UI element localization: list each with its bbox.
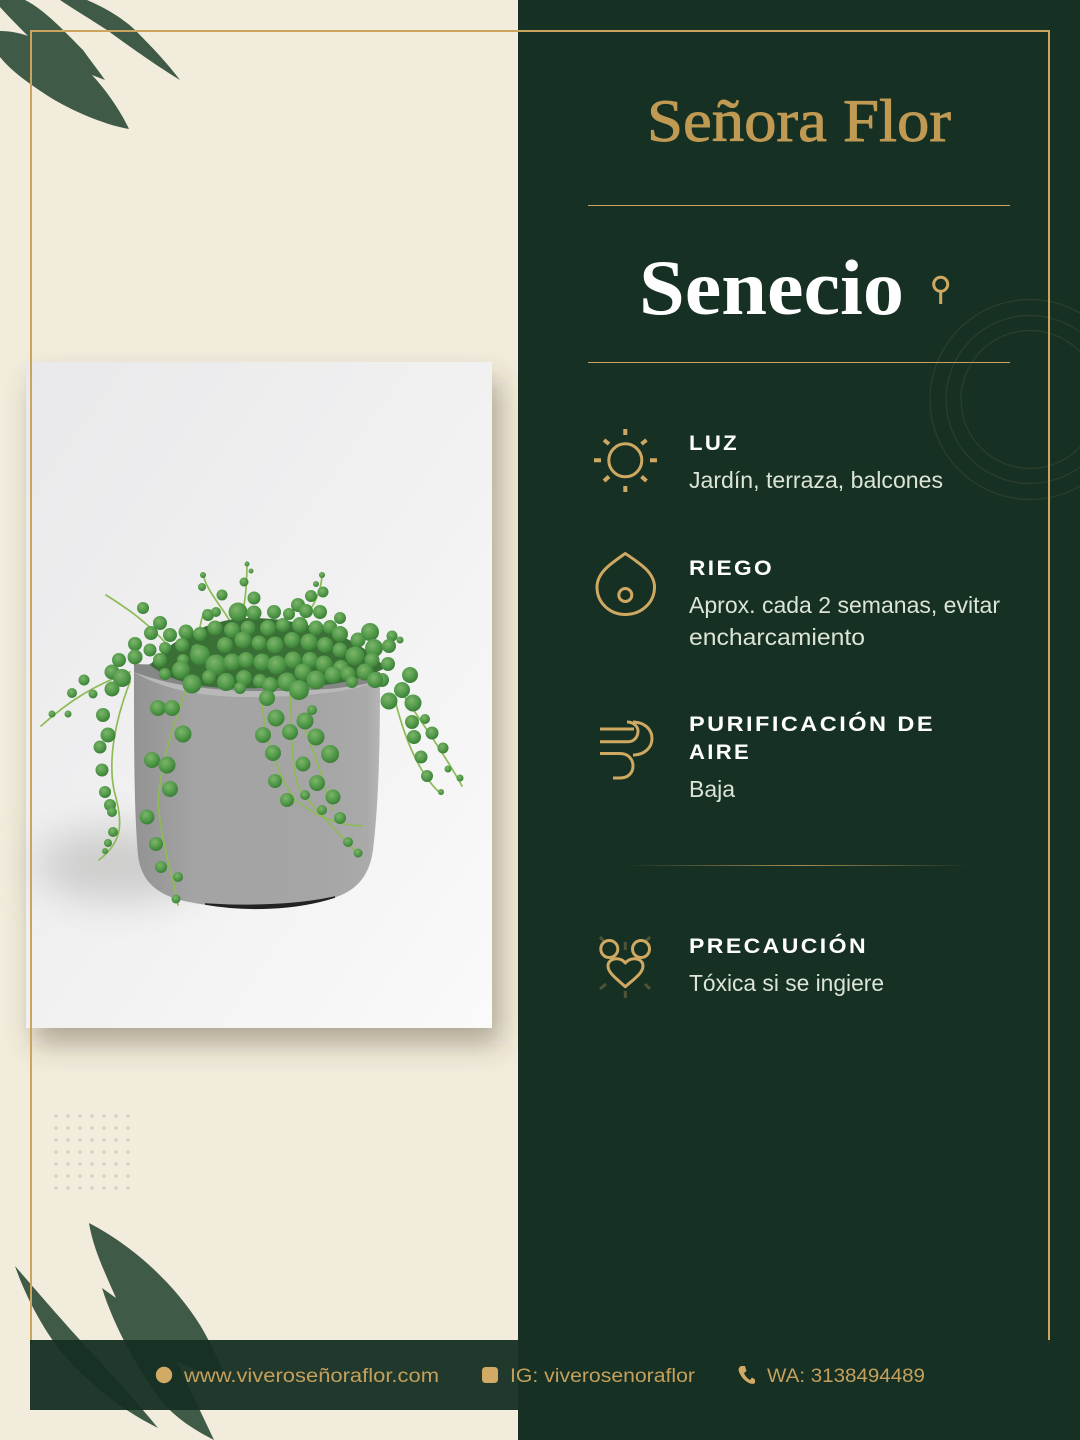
label: PURIFICACIÓN DE (689, 712, 935, 736)
photo: potted senecio plant (26, 362, 492, 1028)
value: Tóxica si se ingiere (689, 970, 884, 996)
brand title: Señora Flor (647, 88, 951, 154)
label: RIEGO (689, 557, 774, 580)
item: precaución (600, 934, 884, 998)
footer bar (30, 1340, 1050, 1410)
decoration: concentric circles (930, 300, 1080, 500)
value: Aprox. cada 2 semanas, evitar (689, 592, 1000, 618)
panel: dark green background (518, 0, 1080, 1440)
decoration: top-left leaves (0, 0, 180, 129)
value (689, 592, 1000, 650)
beads (48, 562, 464, 904)
decoration: bottom-left leaves (15, 1223, 232, 1440)
plant name: Senecio (639, 244, 904, 331)
icon: instagram square (482, 1367, 498, 1383)
icon: pin (934, 277, 948, 304)
divider top (588, 205, 1010, 206)
pot cast shadow (35, 829, 205, 901)
icon: water drop (597, 554, 654, 614)
icon: phone (738, 1366, 755, 1384)
dark mass behind beads (150, 618, 385, 688)
website: www.viveroseñoraflor.com (183, 1366, 439, 1387)
value: encharcamiento (689, 624, 865, 650)
value: Jardín, terraza, balcones (689, 467, 943, 493)
icon: heart warning (600, 937, 650, 998)
pot (134, 649, 380, 908)
stems (41, 562, 462, 905)
photo background (26, 362, 492, 1028)
panel: cream background (0, 0, 518, 1440)
icon: web dot (156, 1367, 172, 1383)
whatsapp: WA: 3138494489 (767, 1366, 925, 1387)
item: riego (597, 554, 1000, 650)
photo shadow (34, 380, 500, 1044)
instagram: IG: viverosenoraflor (510, 1366, 696, 1387)
label: PRECAUCIÓN (689, 934, 868, 958)
label: AIRE (689, 741, 751, 764)
label (689, 712, 935, 764)
icon: sun (594, 429, 657, 492)
item: luz (594, 429, 943, 493)
icon: wind (600, 722, 652, 778)
label: LUZ (689, 432, 739, 455)
value: Baja (689, 776, 735, 802)
item: purificación de aire (600, 712, 935, 802)
decoration: dot grid (54, 1114, 130, 1190)
divider bottom (588, 362, 1010, 363)
divider gradient (625, 865, 970, 866)
